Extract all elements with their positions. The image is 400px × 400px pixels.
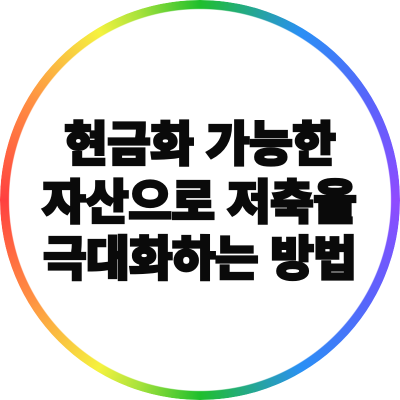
title line 3: 극대화하는 방법: [43, 234, 357, 286]
title line 1: 현금화 가능한: [64, 119, 336, 172]
title line 2: 자산으로 저축을: [42, 177, 357, 230]
